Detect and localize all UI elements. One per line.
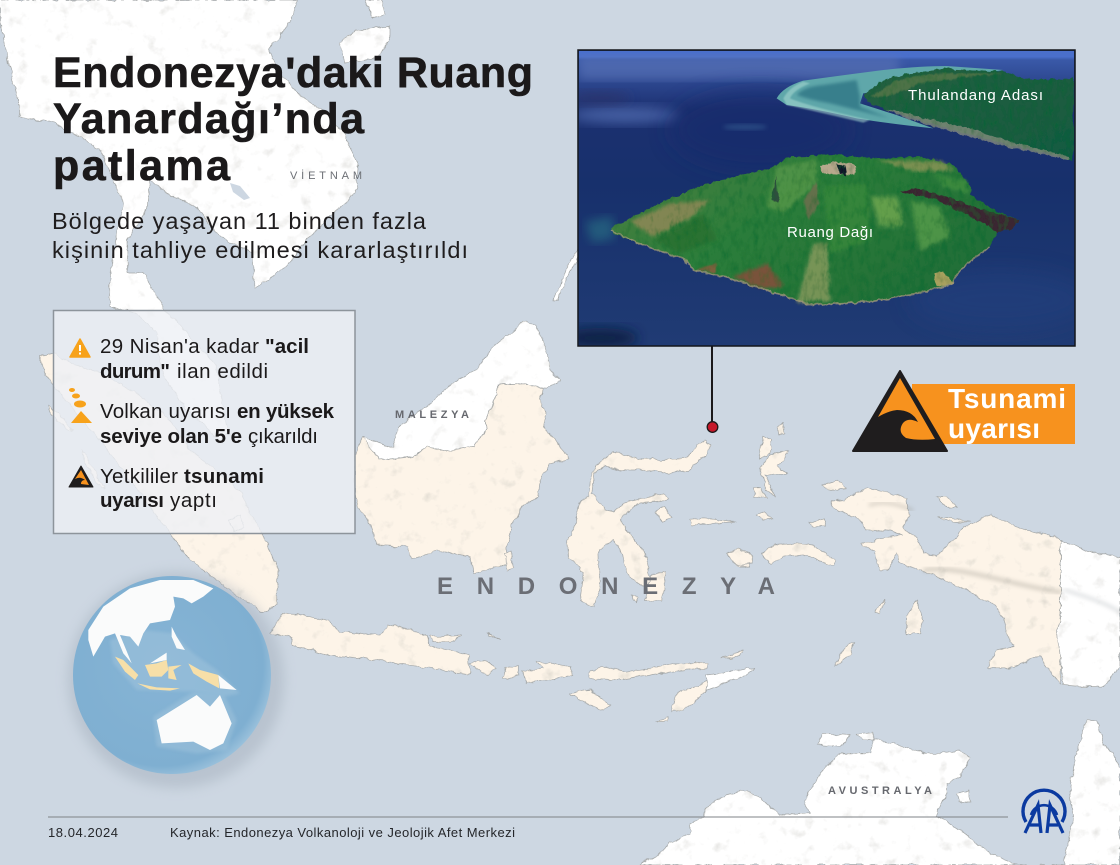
terrain shading: Papua ridge bbox=[870, 503, 1120, 612]
fact: emergency: ilan edildi bbox=[177, 360, 268, 383]
globe: shallow shelves bbox=[110, 630, 240, 753]
globe sphere bbox=[73, 576, 271, 774]
subtitle bbox=[52, 208, 468, 263]
title: Yanardağı’nda bbox=[53, 95, 365, 143]
subtitle: kişinin tahliye edilmesi kararlaştırıldı bbox=[52, 237, 468, 263]
photo: satellite view of Ruang bbox=[562, 50, 1090, 348]
land: east timor bbox=[707, 668, 753, 690]
subtitle: Bölgede yaşayan 11 binden fazla bbox=[52, 208, 427, 234]
fact: volcano alert: Volkan uyarısı bbox=[100, 400, 231, 423]
country label: Avustralya: AVUSTRALYA bbox=[828, 785, 932, 797]
fact: tsunami warning: uyarısı bbox=[100, 489, 164, 512]
globe: white land bbox=[88, 580, 237, 750]
label: Thulandang Adası: Thulandang Adası bbox=[908, 87, 1043, 104]
land: borneo malaysia bbox=[362, 320, 562, 460]
photo: lava flow bbox=[900, 188, 1020, 232]
footer source: Kaynak: Endonezya Volkanoloji ve Jeolojik Afet Merkezi bbox=[170, 825, 515, 840]
globe shadow bbox=[68, 572, 284, 788]
title bbox=[53, 49, 533, 190]
photo: vegetation patches bbox=[610, 160, 1020, 305]
country label: Malezya: MALEZYA bbox=[395, 409, 469, 421]
leader line to Ruang bbox=[711, 346, 713, 426]
icon: warning triangle bbox=[70, 339, 90, 357]
title: Endonezya'daki Ruang bbox=[53, 49, 533, 97]
icon: volcano bbox=[69, 388, 92, 423]
footer date: 18.04.2024 bbox=[48, 825, 118, 840]
globe: indonesia highlighted bbox=[115, 657, 219, 691]
photo: shoreline bbox=[610, 230, 990, 305]
footer rule bbox=[48, 816, 1008, 818]
fact: emergency: "acil bbox=[265, 335, 309, 358]
fact: emergency: durum" bbox=[100, 360, 170, 383]
fact: volcano alert: çıkarıldı bbox=[248, 425, 318, 448]
tsunami warning badge bbox=[853, 371, 1075, 451]
fact: emergency: 29 Nisan'a kadar bbox=[100, 335, 259, 358]
land: sumatra bbox=[40, 353, 278, 612]
photo: Thulandang reef bbox=[777, 66, 1003, 128]
land: sulawesi and nearby islands bbox=[567, 440, 750, 607]
land: australia bbox=[640, 720, 1120, 865]
badge text: Tsunami bbox=[948, 383, 1066, 414]
badge triangle icon bbox=[853, 371, 947, 451]
lake: Tonle Sap bbox=[230, 183, 250, 200]
photo: Ruang shallows bbox=[585, 216, 615, 243]
icon: tsunami small bbox=[69, 466, 93, 487]
logo: AA bbox=[1023, 790, 1065, 833]
land: maluku islands bbox=[727, 423, 970, 667]
fact: tsunami warning: yaptı bbox=[170, 489, 217, 512]
fact: tsunami warning: Yetkililer bbox=[100, 465, 178, 488]
label: Ruang Dağı: Ruang Dağı bbox=[787, 224, 873, 241]
fact: volcano alert: en yüksek bbox=[237, 400, 335, 423]
country label: Vietnam: VİETNAM bbox=[290, 169, 362, 182]
panel background bbox=[54, 310, 355, 534]
land: java and lesser sunda islands bbox=[270, 613, 743, 722]
globe bbox=[68, 572, 284, 788]
land: papua bbox=[830, 488, 1061, 685]
photo: crater bbox=[820, 162, 857, 175]
land: papua new guinea bbox=[1057, 540, 1120, 687]
land: kalimantan bbox=[355, 383, 570, 573]
fact: volcano alert: seviye olan 5'e bbox=[100, 425, 242, 448]
photo: Ruang island bbox=[610, 155, 1020, 305]
badge text: uyarısı bbox=[948, 413, 1040, 444]
photo: sea bbox=[579, 51, 1074, 270]
fact: tsunami warning: tsunami bbox=[184, 465, 264, 488]
photo: sea glare bbox=[562, 56, 1090, 348]
country label: Endonezya: ENDONEZYA bbox=[437, 573, 775, 600]
panel: key facts bbox=[54, 310, 355, 534]
land: mainland southeast asia bbox=[0, 0, 578, 440]
title: patlama bbox=[53, 142, 231, 190]
location marker: Ruang bbox=[707, 422, 718, 432]
badge bar bbox=[912, 384, 1075, 444]
photo: Thulandang island bbox=[863, 68, 1073, 162]
